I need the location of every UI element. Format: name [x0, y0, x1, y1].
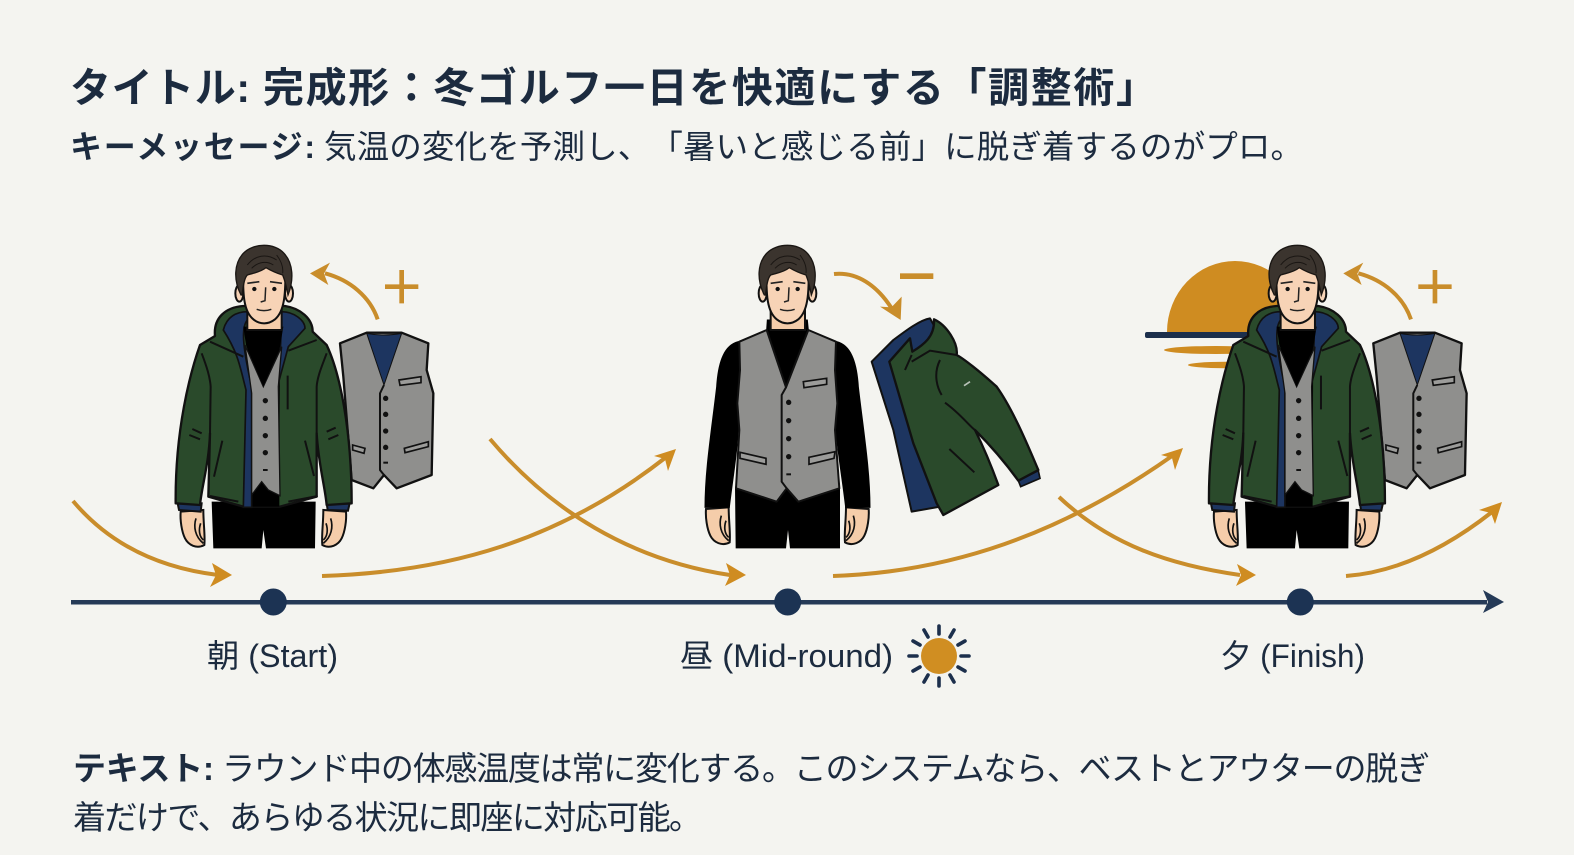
figure: midday, vest with jacket removed	[705, 245, 1040, 548]
title: タイトル:	[70, 65, 250, 111]
key message: 気温の変化を予測し、「暑いと感じる前」に脱ぎ着するのがプロ。	[324, 129, 1303, 165]
label: morning: 朝 (Start)	[207, 638, 338, 674]
temperature arrows	[73, 439, 1502, 587]
gray vest worn	[736, 330, 839, 502]
figure: morning, jacket with vest added	[176, 245, 433, 548]
key message: キーメッセージ:	[70, 129, 315, 165]
body text: ラウンド中の体感温度は常に変化する。このシステムなら、ベストとアウターの脱ぎ	[222, 750, 1430, 787]
body text: 着だけで、あらゆる状況に即座に対応可能。	[73, 799, 702, 836]
arrow: take off	[834, 274, 902, 320]
removed green jacket	[872, 318, 1040, 515]
icon: midday sun	[909, 626, 969, 686]
timeline	[71, 588, 1504, 616]
body text: テキスト:	[73, 750, 214, 787]
label: midday: 昼 (Mid-round)	[680, 638, 893, 674]
title: 完成形：冬ゴルフ一日を快適にする「調整術」	[263, 65, 1157, 111]
body text	[73, 750, 1430, 836]
black base layer, trousers and hands	[705, 320, 870, 548]
figure: evening, jacket with vest added	[1209, 245, 1467, 548]
label: evening: 夕 (Finish)	[1220, 638, 1365, 674]
minus sign	[900, 273, 933, 279]
sunset icon	[1145, 261, 1303, 368]
